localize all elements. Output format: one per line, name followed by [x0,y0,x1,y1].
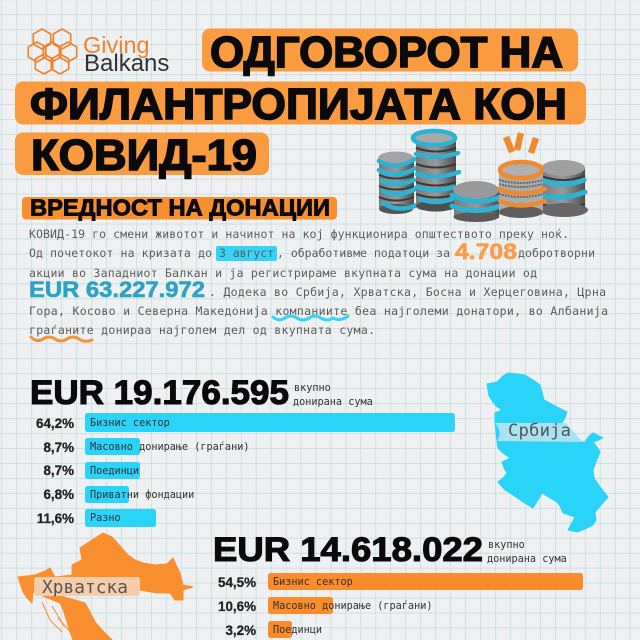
total: Croatia: донирана сума [487,554,567,565]
total: Croatia: EUR 14.618.022 [213,531,483,569]
number: total sum: EUR 63.227.972 [29,277,205,302]
bar: individuals [225,621,322,638]
body line 2: добротворни [518,246,595,260]
label band: Croatia [34,577,140,596]
title line 1: ОДГОВОРОТ НА [210,28,563,77]
body line 3: акции во Западниот Балкан и ја регистрираме вкупната сума на донации од [29,266,537,280]
title line 2: ФИЛАНТРОПИЈАТА КОН [30,80,567,129]
bar: individuals: 8,7% [43,463,74,478]
title line 3: КОВИД-19 [31,131,257,180]
map: Croatia [18,533,193,640]
coin stack A [378,152,419,214]
coin stack C [452,181,500,222]
bar: business: Бизнис сектор [90,418,170,429]
coin stack E [540,160,588,217]
label: Croatia: Хрватска [42,577,128,598]
title [15,28,586,180]
squiggle: companies [273,316,348,320]
bar: business: 64,2% [36,416,74,431]
body line 4: . Додека во Србија, Хрватска, Босна и Херцеговина, Црна [209,285,606,299]
bar: individuals: 3,2% [225,623,256,638]
bar: individuals: Поединци [273,625,322,636]
icon: hexagon flower [28,29,77,74]
squiggle: citizens [31,337,92,341]
body line 2: , обработивме податоци за [277,246,450,260]
bar: crowdfunding: 10,6% [218,599,256,614]
bar: private foundations: 6,8% [43,487,74,502]
bar: business [36,413,455,432]
panel: Croatia [18,531,583,640]
bar: individuals: Поединци [90,466,139,477]
label band: Serbia [495,423,582,442]
bar: business: 54,5% [218,575,256,590]
logo: Giving Balkans [28,29,169,77]
total: Serbia: донирана сума [293,397,373,408]
total: Serbia: вкупно [294,383,331,394]
icon: orange sparkle marks [506,133,536,153]
map: Serbia [487,373,608,532]
body line 6: граѓаните донираа најголем дел од вкупната сума. [29,323,375,337]
bar: crowdfunding [218,597,432,614]
bar: private foundations: Приватни фондации [90,489,194,501]
logo text: Giving [83,32,150,58]
number: actions count: 4.708 [455,239,517,264]
islands [42,602,74,636]
bar: other: Разно [90,513,121,524]
bar: private foundations [43,486,194,503]
bar chart: Croatia [218,573,583,638]
logo: Giving Balkans: Balkans [84,50,169,77]
panel: Serbia [30,373,608,532]
bar: other: 11,6% [37,511,74,526]
intro text block [29,227,608,341]
coin stack B [413,131,459,212]
bar: business: Бизнис сектор [273,577,353,588]
total: Serbia: EUR 19.176.595 [30,374,289,412]
heading: donation value: ВРЕДНОСТ НА ДОНАЦИИ [30,194,330,220]
label: Serbia: Србија [508,421,571,441]
bar: crowdfunding [43,438,249,455]
bar: business [218,573,583,590]
coin stack D [499,162,545,218]
total: Croatia: вкупно [488,540,525,551]
body line 2: Од почетокот на кризата до [29,246,212,260]
body line 5: Гора, Косово и Северна Македонија компаниите беа најголеми донатори, во Албанија [29,304,608,318]
bar: individuals [43,462,140,479]
bar: crowdfunding: Масовно донирање (граѓани) [90,441,249,453]
body line 1: КОВИД-19 го смени животот и начинот на кој функционира општеството преку ноќ. [29,227,569,241]
bar chart: Serbia [36,413,455,527]
highlight: date [216,246,277,261]
coins illustration [378,131,588,222]
bar: crowdfunding: 8,7% [43,440,74,455]
body line 2: 3 август [219,246,274,260]
bar: crowdfunding: Масовно донирање (граѓани) [273,600,432,612]
bar: other [37,509,156,527]
